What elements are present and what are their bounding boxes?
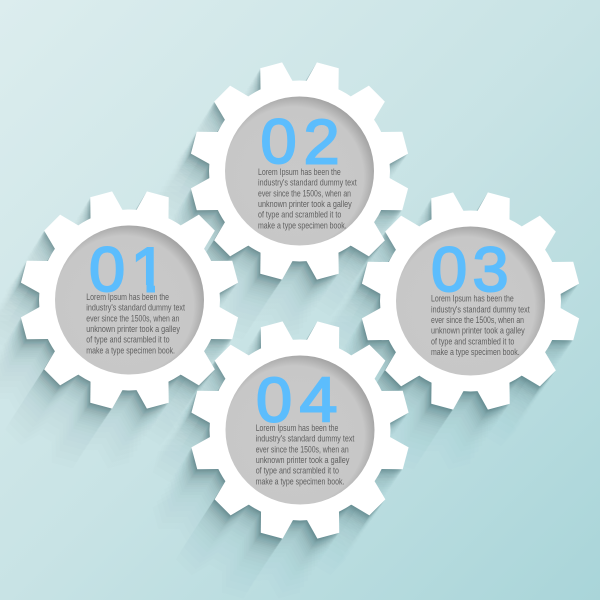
gear 03 text block	[431, 293, 530, 357]
gear 03 text block: unknown printer took a galley	[431, 325, 525, 336]
number 03	[431, 234, 509, 305]
number 02: 0	[260, 106, 297, 177]
number 01: 0	[89, 234, 125, 305]
gear 01 text block: ever since the 1500s, when an	[86, 312, 179, 323]
number 03: 0	[431, 234, 467, 305]
gear 02 text block: ever since the 1500s, when an	[258, 187, 351, 198]
gear 01 text block: make a type specimen book.	[86, 344, 175, 355]
number 03: 3	[472, 234, 509, 305]
gear 01 text block: industry's standard dummy text	[86, 302, 185, 313]
number 02: 2	[304, 106, 340, 177]
gear 03 text block: of type and scrambled it to	[431, 335, 514, 346]
gear 03 text block: make a type specimen book.	[431, 346, 520, 357]
gear 01 text block: Lorem Ipsum has been the	[86, 291, 169, 302]
gear 04 text block	[256, 422, 355, 486]
gear 02 inner disc	[225, 96, 374, 246]
gear 03 inner disc	[396, 226, 545, 376]
gear 04 text block: Lorem Ipsum has been the	[256, 422, 338, 433]
gear 03 text block: Lorem Ipsum has been the	[431, 293, 514, 304]
gear 04 inner disc	[226, 356, 374, 504]
gear 04 text block: ever since the 1500s, when an	[256, 443, 349, 454]
gear 03 text block: ever since the 1500s, when an	[431, 314, 524, 325]
gear 02 text block: of type and scrambled it to	[258, 209, 341, 220]
gear 04	[190, 320, 410, 540]
number 02	[260, 106, 340, 177]
gear 02 body	[190, 61, 409, 281]
gear 02 text block	[258, 166, 357, 230]
gear 04 text block: industry's standard dummy text	[256, 433, 355, 444]
gear 02	[190, 61, 409, 281]
gear 01 text block: of type and scrambled it to	[86, 334, 170, 345]
number 04: 4	[300, 365, 337, 435]
gear 01 text block	[86, 291, 185, 355]
number 04: 0	[256, 364, 292, 435]
gear 03 body	[361, 191, 580, 411]
gear 02 text block: make a type specimen book.	[258, 219, 347, 230]
gear 01 text block: unknown printer took a galley	[86, 323, 180, 334]
gear 02 text block: Lorem Ipsum has been the	[258, 166, 341, 177]
number 04	[256, 364, 337, 435]
gear 01 inner disc	[55, 226, 204, 374]
gear 04 text block: unknown printer took a galley	[256, 454, 350, 465]
gear 04 body	[190, 320, 410, 540]
gear 03 text block: industry's standard dummy text	[431, 303, 530, 314]
gear 01	[20, 190, 239, 410]
number 01: 1	[131, 234, 167, 305]
gear 02 text block: unknown printer took a galley	[258, 198, 352, 209]
number 01	[90, 246, 155, 292]
gear 04 text block: of type and scrambled it to	[256, 465, 339, 476]
gear 04 text block: make a type specimen book.	[256, 475, 344, 486]
gear 03	[361, 191, 580, 411]
gear 01 body	[20, 190, 239, 410]
gear 02 text block: industry's standard dummy text	[258, 177, 357, 188]
